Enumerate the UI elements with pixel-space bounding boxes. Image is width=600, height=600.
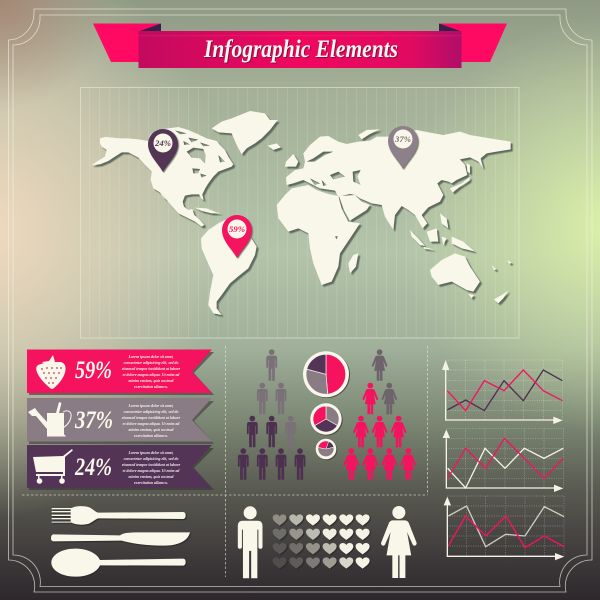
- icon: watering can: [28, 402, 71, 436]
- body text: et dolore magna aliqua. Ut enim ad: [123, 469, 179, 473]
- Americas: [92, 111, 281, 315]
- Southeast Asia islands: [410, 213, 475, 252]
- Novaya Zemlya: [358, 129, 380, 139]
- ribbon: 37%: [27, 398, 214, 444]
- body text: consectetur adipisicing elit, sed do: [124, 410, 178, 414]
- world map: [92, 111, 512, 315]
- ribbon band: [138, 31, 462, 68]
- knife: [51, 532, 190, 546]
- pin: 59%: [222, 215, 252, 258]
- North America: [92, 127, 233, 227]
- Iceland: [268, 143, 281, 150]
- body text: exercitation ullamco.: [134, 385, 168, 389]
- line chart 2: [443, 428, 563, 492]
- title text: Infographic Elements: [203, 36, 398, 63]
- icon: woman figure: [381, 506, 417, 578]
- icon: cutlery: [51, 506, 190, 577]
- axes: [446, 370, 555, 420]
- pie chart: large: [303, 351, 350, 398]
- Greenland: [212, 111, 278, 154]
- Arabia: [339, 195, 370, 221]
- United Kingdom: [285, 154, 298, 167]
- body text: eiusmod tempor incididunt ut labore: [122, 367, 180, 371]
- pictogram: women pyramid: [344, 349, 416, 480]
- map panel frame: [80, 88, 519, 338]
- pin: 24%: 24%: [154, 139, 171, 148]
- body text: minim veniam, quis nostrud: [129, 475, 174, 479]
- body text: consectetur adipisicing elit, sed do: [124, 361, 178, 365]
- body text: eiusmod tempor incididunt ut labore: [122, 416, 180, 420]
- Australia: [430, 253, 480, 298]
- pin: 24%: [148, 129, 178, 172]
- body text: Lorem ipsum dolor sit amet,: [127, 404, 174, 408]
- pie chart: small: [316, 439, 337, 460]
- axes: [447, 505, 556, 556]
- body text: minim veniam, quis nostrud: [129, 379, 174, 383]
- fork: [52, 506, 186, 525]
- Cuba and Hispaniola: [195, 208, 222, 213]
- South America: [201, 220, 257, 315]
- pie chart: medium: [310, 403, 343, 436]
- icon: strawberry: [36, 355, 66, 389]
- Japan: [450, 163, 470, 193]
- pin: 37%: [388, 126, 418, 169]
- pin: 59%: 59%: [229, 225, 245, 234]
- percent 37%: 37%: [74, 407, 113, 434]
- body text: Lorem ipsum dolor sit amet,: [127, 355, 174, 359]
- ribbon: 24%: [27, 445, 214, 490]
- ribbon: 59%: [27, 350, 214, 395]
- pin: 37%: 37%: [394, 135, 411, 144]
- Africa: [277, 185, 360, 285]
- ribbon right tail: [439, 24, 507, 62]
- body text: Lorem ipsum dolor sit amet,: [127, 451, 174, 455]
- pictogram: men pyramid: [238, 349, 305, 480]
- body text: et dolore magna aliqua. Ut enim ad: [123, 422, 179, 426]
- ribbon left tail: [93, 24, 161, 62]
- Madagascar: [348, 253, 358, 273]
- icon: man figure: [238, 506, 262, 578]
- Eurasia: [286, 130, 511, 230]
- line chart 3: [444, 496, 564, 560]
- title text shadow: Infographic Elements: [204, 37, 399, 64]
- body text: et dolore magna aliqua. Ut enim ad: [123, 373, 179, 377]
- heart grid: [273, 514, 370, 569]
- icon: shopping cart: [33, 449, 73, 484]
- Old World: [277, 129, 512, 303]
- percent 59%: 59%: [75, 357, 112, 384]
- dashed panel dividers: [22, 346, 428, 577]
- spoon: [51, 549, 186, 577]
- body text: eiusmod tempor incididunt ut labore: [122, 463, 180, 467]
- line chart 1: [442, 360, 563, 424]
- body text: exercitation ullamco.: [134, 434, 168, 438]
- body text: exercitation ullamco.: [134, 481, 168, 485]
- title ribbon: [93, 24, 507, 68]
- axes: [446, 438, 555, 488]
- New Zealand and Pacific islands: [492, 260, 512, 303]
- body text: consectetur adipisicing elit, sed do: [124, 457, 178, 461]
- percent 24%: 24%: [74, 454, 112, 481]
- body text: minim veniam, quis nostrud: [129, 428, 174, 432]
